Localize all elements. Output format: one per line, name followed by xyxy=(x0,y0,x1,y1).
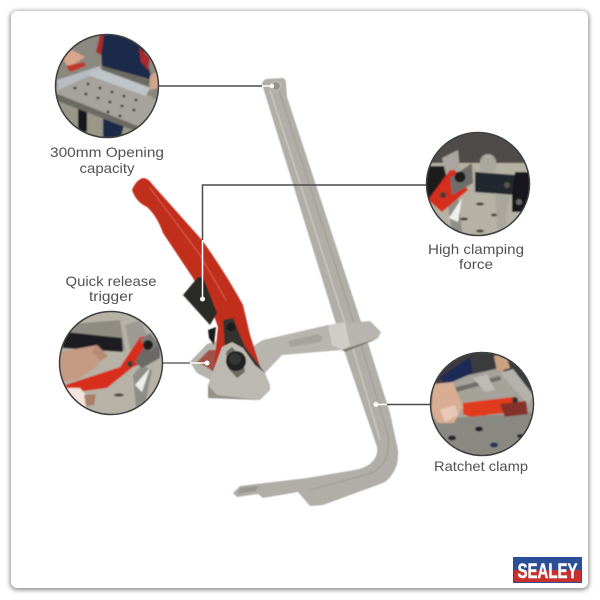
caption: 300mm opening capacity: 300mm Opening xyxy=(50,144,164,160)
caption: quick release trigger: Quick release xyxy=(66,273,157,289)
locking knob xyxy=(226,351,246,371)
photo: ratchet clamp xyxy=(430,352,534,456)
clamp product xyxy=(132,78,398,506)
caption: 300mm opening capacity: capacity xyxy=(80,160,134,176)
caption: quick release trigger xyxy=(66,273,157,304)
trigger xyxy=(183,277,217,325)
caption: 300mm opening capacity xyxy=(50,144,164,176)
photo: welding table with clamp xyxy=(55,34,160,140)
leader line: quick release xyxy=(162,360,210,366)
caption: high clamping force: force xyxy=(459,256,493,272)
logo: Sealey xyxy=(513,557,582,583)
dark lever side plate xyxy=(223,318,265,380)
ratchet gear xyxy=(190,340,222,385)
red handle xyxy=(132,178,262,385)
sliding jaw arm xyxy=(250,321,381,373)
leader line: clamping force xyxy=(200,185,428,302)
caption: ratchet clamp: Ratchet clamp xyxy=(434,458,528,474)
jaw block xyxy=(208,342,270,400)
caption: high clamping force: High clamping xyxy=(428,241,524,257)
caption: quick release trigger: trigger xyxy=(89,288,133,304)
caption: high clamping force xyxy=(428,241,524,272)
photo: high clamping force xyxy=(426,132,530,236)
leader line: ratchet clamp xyxy=(374,402,431,407)
clamp bar xyxy=(233,78,398,506)
photo: quick release trigger xyxy=(59,311,163,415)
leader line: opening capacity xyxy=(159,84,274,88)
logo: Sealey: SEALEY xyxy=(518,560,578,583)
